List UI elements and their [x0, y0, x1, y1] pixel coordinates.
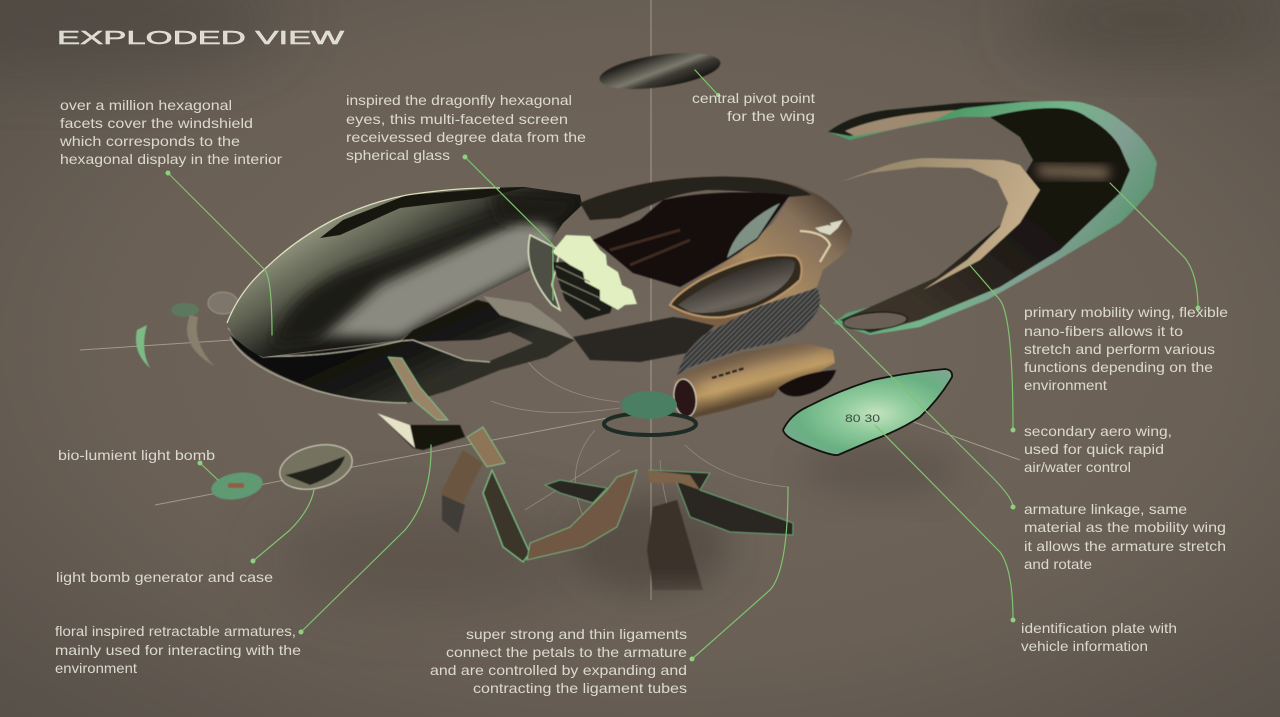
title: EXPLODED VIEW — [57, 28, 344, 48]
armature linkage carbon panel — [677, 288, 820, 375]
green pivot disc and ring — [604, 391, 696, 435]
text: primary mobility wing: stretch and perform various — [1024, 341, 1215, 357]
text: windshield facets: which corresponds to the — [59, 133, 240, 149]
text: dragonfly screen: spherical glass — [346, 147, 450, 163]
text: floral armatures — [55, 623, 301, 676]
text: primary mobility wing: primary mobility wing, flexible — [1024, 304, 1228, 320]
floor shadow beneath fuselage — [573, 317, 717, 362]
text: dragonfly screen: eyes, this multi-faceted screen — [346, 111, 568, 127]
text: central pivot point: for the wing — [727, 108, 815, 124]
text: armature linkage: and rotate — [1024, 556, 1092, 572]
identification plate: 80 30 — [845, 413, 880, 425]
assembly axis lines — [80, 0, 1020, 600]
text: ligaments: contracting the ligament tubes — [473, 680, 687, 696]
text: dragonfly screen — [346, 92, 586, 163]
text: armature linkage — [1024, 501, 1226, 572]
text: floral armatures: floral inspired retractable armatures, — [55, 623, 296, 639]
green callout leader lines — [166, 70, 1200, 662]
text: secondary aero wing: secondary aero wing, — [1024, 423, 1172, 439]
text: windshield facets: hexagonal display in the interior — [60, 151, 282, 167]
exploded small parts left of the nose — [136, 292, 238, 368]
text: identification plate: identification plate with — [1021, 620, 1177, 636]
text: armature linkage: it allows the armature stretch — [1024, 538, 1226, 554]
text: secondary aero wing — [1024, 423, 1172, 475]
text: windshield facets — [59, 97, 282, 167]
bronze cylinder — [671, 343, 836, 418]
text: primary mobility wing: nano-fibers allows it to — [1024, 323, 1183, 339]
primary mobility wing — [828, 101, 1157, 335]
text: central pivot point: central pivot point — [692, 90, 815, 106]
text: dragonfly screen: receivessed degree data from the — [346, 129, 586, 145]
identification plate — [783, 369, 952, 455]
light bomb and generator case — [209, 438, 357, 503]
fuselage hull — [228, 296, 575, 403]
text: primary mobility wing — [1024, 304, 1228, 393]
central pivot point pod — [597, 47, 723, 95]
hexagonal screen — [528, 235, 637, 320]
text: ligaments: and are controlled by expanding and — [430, 662, 687, 678]
text: ligaments: super strong and thin ligaments — [466, 626, 687, 642]
text: ligaments — [430, 626, 687, 696]
text: central pivot point — [692, 90, 815, 124]
text: primary mobility wing: functions depending on the — [1024, 359, 1213, 375]
fuselage glass canopy — [227, 187, 583, 357]
text: light bomb generator: light bomb generator and case — [56, 569, 273, 585]
floral armature petals — [377, 357, 793, 590]
text: secondary aero wing: used for quick rapid — [1024, 441, 1164, 457]
text: identification plate: vehicle information — [1021, 638, 1148, 654]
text: windshield facets: facets cover the windshield — [60, 115, 253, 131]
text: identification plate — [1021, 620, 1177, 654]
text: floral armatures: mainly used for interacting with the — [55, 642, 301, 658]
text: bio-lumient light bomb: bio-lumient light bomb — [58, 447, 215, 463]
text: dragonfly screen: inspired the dragonfly hexagonal — [346, 92, 572, 108]
text: secondary aero wing: air/water control — [1024, 459, 1131, 475]
text: floral armatures: environment — [55, 660, 137, 676]
text: primary mobility wing: environment — [1024, 377, 1107, 393]
text: armature linkage: material as the mobility wing — [1024, 519, 1226, 535]
text: armature linkage: armature linkage, same — [1024, 501, 1187, 517]
text: ligaments: connect the petals to the armature — [446, 644, 687, 660]
cockpit section — [580, 177, 852, 327]
text: windshield facets: over a million hexagonal — [60, 97, 232, 113]
